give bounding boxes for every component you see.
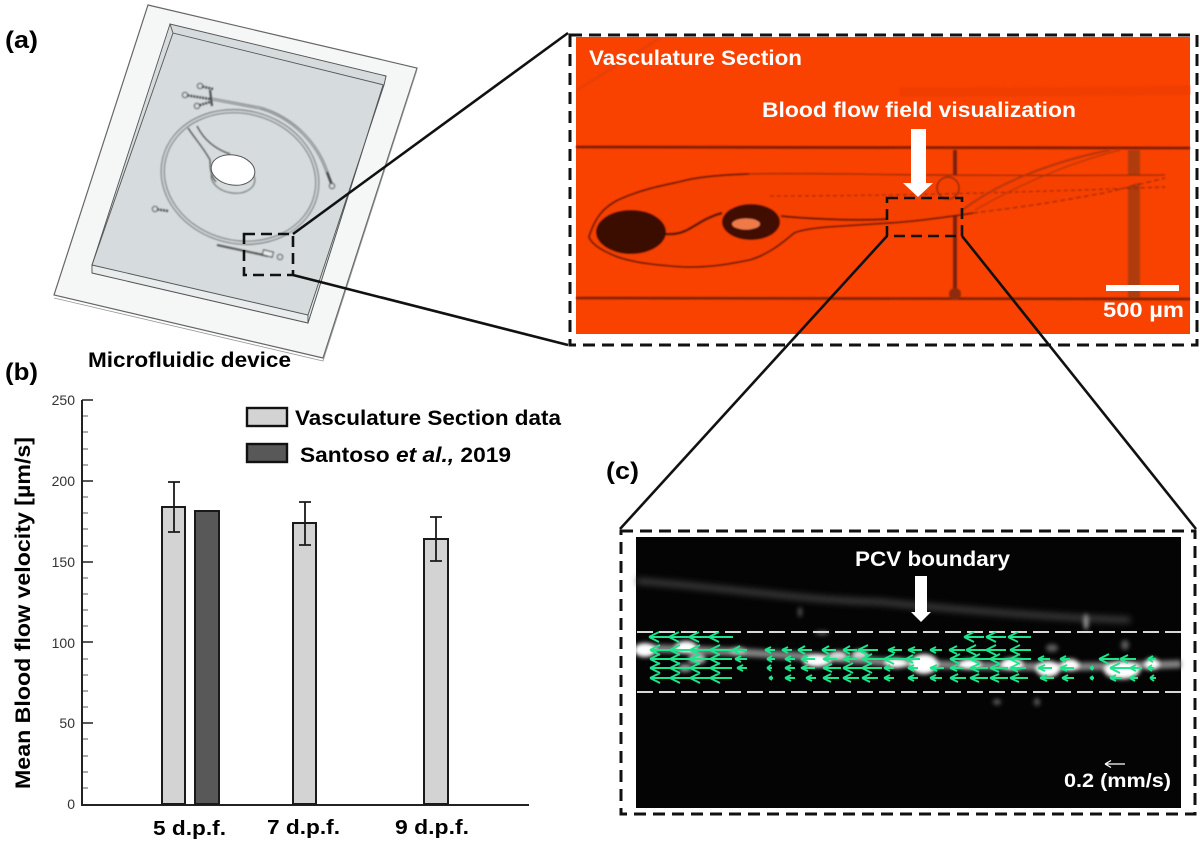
panel: microfluidic device — [54, 5, 417, 361]
panel label (c): (c) — [606, 458, 639, 485]
faint upper vessel streak — [637, 581, 1130, 620]
panel: PCV flow field image — [634, 537, 1181, 808]
bars — [162, 507, 448, 804]
label: PCV boundary: PCV boundary — [855, 548, 1010, 571]
x axis labels: 7 d.p.f. — [267, 817, 340, 839]
zebrafish larva — [589, 150, 1165, 267]
y axis tick labels: 200 — [52, 473, 75, 489]
central hole — [209, 151, 257, 189]
zoom connector lines: photo to PCV image — [620, 236, 1196, 529]
dashed box on device — [244, 234, 293, 275]
small faint spots — [798, 607, 1129, 706]
panel: vasculature section photo — [576, 37, 1190, 334]
y axis tick labels: 250 — [52, 392, 75, 408]
label: vasculature section: Vasculature Section — [589, 47, 802, 70]
y axis tick labels — [52, 392, 75, 812]
dashed frame: vasculature section — [570, 35, 1197, 345]
error bars — [168, 482, 442, 561]
microchannel network — [149, 83, 335, 260]
device chip block — [92, 24, 386, 323]
y axis and ticks — [82, 400, 529, 805]
label: microfluidic device: Microfluidic device — [88, 349, 291, 372]
dashed frame: PCV flow field image — [621, 531, 1195, 814]
bar chart: mean blood flow velocity — [12, 392, 561, 840]
scale bar — [1106, 285, 1179, 291]
x axis labels: 9 d.p.f. — [395, 817, 469, 839]
y axis title: Mean Blood flow velocity [µm/s] — [12, 437, 35, 789]
legend — [247, 407, 561, 467]
bright blood cells in the vessel — [634, 641, 1181, 679]
dashed PCV boundary lines — [637, 632, 1181, 692]
green velocity vectors — [649, 632, 1156, 683]
black fluorescence background — [636, 537, 1181, 808]
y axis tick labels: 0 — [67, 796, 75, 812]
dashed detail box — [887, 198, 962, 236]
panel label (a): (a) — [5, 27, 38, 54]
x axis labels: 5 d.p.f. — [153, 818, 226, 840]
panel label (b): (b) — [5, 359, 38, 386]
legend: Santoso et al., 2019 — [300, 444, 511, 467]
orange micrograph background — [576, 37, 1190, 334]
zoom connector lines: device to photo — [293, 33, 568, 345]
label: 500 µm: 500 µm — [1103, 299, 1184, 322]
y axis tick labels: 150 — [52, 554, 75, 570]
reference vector arrow — [1105, 760, 1125, 768]
microscope channels — [576, 38, 1190, 300]
arrow: points to PCV boundary — [911, 576, 931, 622]
label: blood flow field visualization: Blood flow field visualization — [762, 99, 1076, 122]
legend: Vasculature Section data — [295, 407, 561, 430]
x axis labels — [153, 817, 469, 840]
y axis tick labels: 100 — [52, 635, 75, 651]
label: 0.2 mm/s: 0.2 (mm/s) — [1064, 771, 1171, 792]
y axis tick labels: 50 — [59, 715, 75, 731]
device base plate — [54, 5, 417, 358]
arrow: points to visualization region — [903, 129, 933, 197]
